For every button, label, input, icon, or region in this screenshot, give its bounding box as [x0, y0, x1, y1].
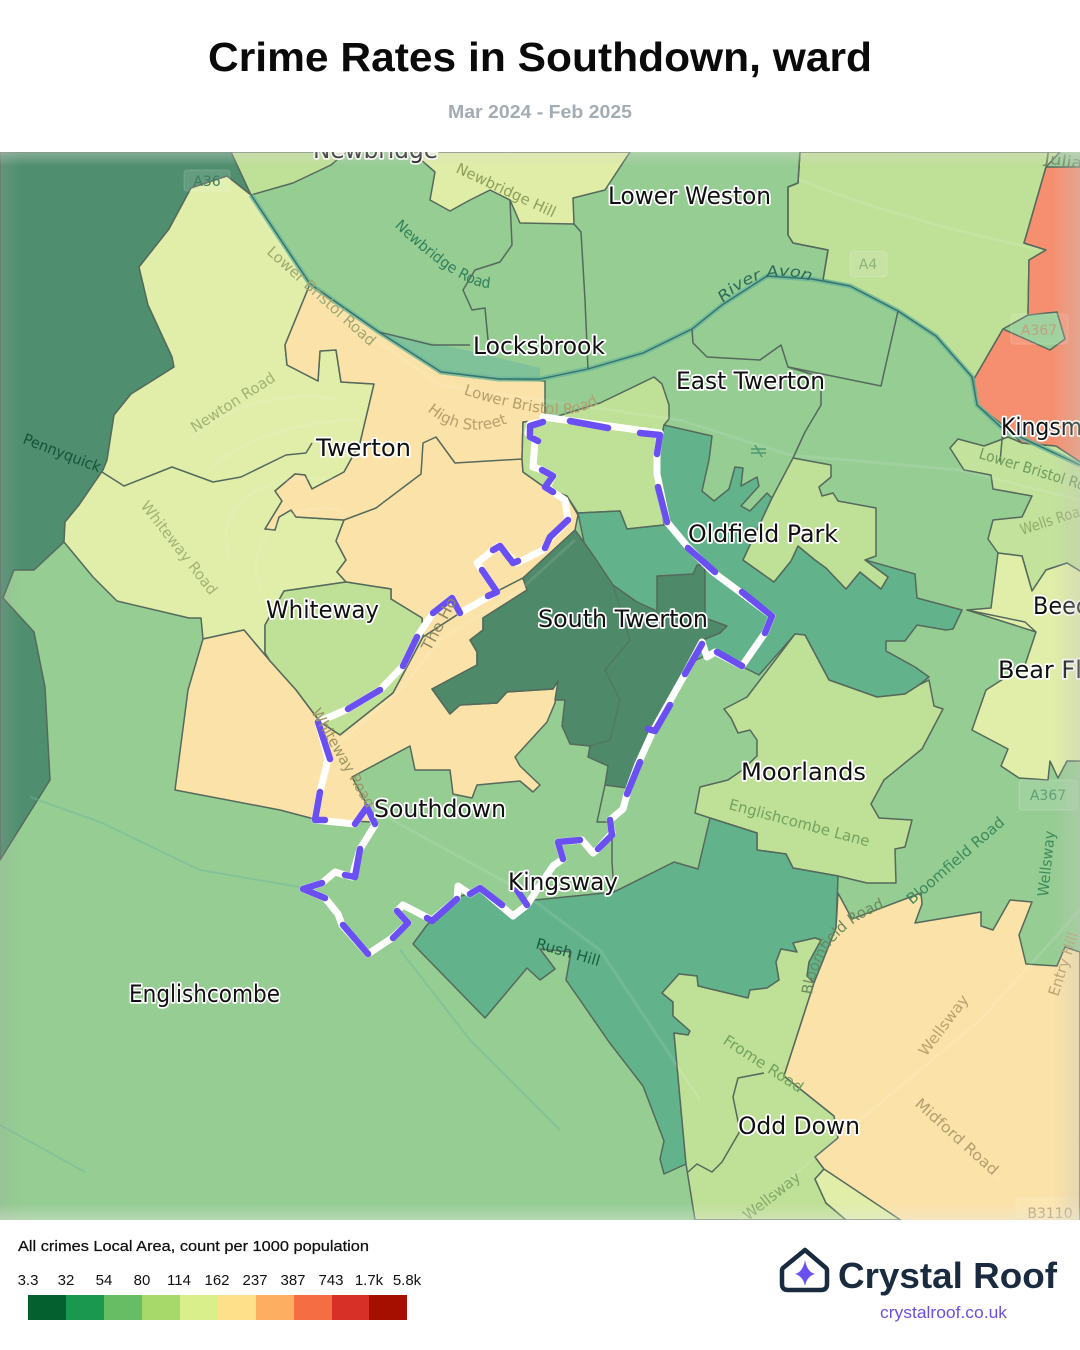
- area labels: Twerton: [315, 434, 411, 462]
- legend scale labels: 32: [58, 1272, 74, 1289]
- region: base green: [0, 152, 1080, 1220]
- region: Oldfield light green: [743, 458, 888, 589]
- date range: Mar 2024 - Feb 2025: [448, 102, 632, 122]
- road shields: A367: [1030, 788, 1066, 804]
- road labels: Pennyquick: [21, 430, 104, 476]
- area labels: Moorlands: [741, 758, 866, 786]
- road labels: River Avon: [718, 265, 812, 302]
- stream: Englishcombe brook: [0, 797, 560, 1172]
- road labels: Whiteway Road: [308, 705, 379, 811]
- website: crystalroof.co.uk: [880, 1304, 1008, 1322]
- road labels: Bloomfield Road: [903, 813, 1008, 908]
- region: upper east light: [788, 152, 1060, 379]
- area labels: Oldfield Park: [688, 520, 838, 548]
- legend scale labels: 1.7k: [355, 1272, 384, 1289]
- region: Moorlands light green: [695, 634, 943, 883]
- road labels: Newbridge Road: [395, 219, 490, 288]
- legend scale labels: [18, 1272, 422, 1289]
- area labels: Locksbrook: [473, 332, 605, 360]
- road labels: Englishcombe Lane: [727, 795, 872, 850]
- logo wordmark: Crystal Roof: [838, 1255, 1058, 1296]
- legend title: All crimes Local Area, count per 1000 population: [18, 1238, 369, 1255]
- road labels: The Ho: [417, 594, 461, 655]
- road labels: Whiteway Road: [137, 497, 221, 598]
- region: Kingsway and Rush Hill mid green: [413, 818, 838, 1174]
- road labels: Newbridge Hill: [453, 159, 559, 221]
- region: South Twerton dark: [432, 530, 727, 788]
- region: Odd Down light green: [662, 938, 846, 1220]
- legend scale labels: 54: [96, 1272, 112, 1289]
- region: dark west: [0, 152, 251, 860]
- area labels: Odd Down: [738, 1112, 860, 1140]
- title: Crime Rates in Southdown, ward: [208, 34, 872, 80]
- roads and streams: [0, 180, 1080, 1220]
- region: Newbridge Hill pale: [412, 152, 630, 224]
- region: Kingsmead red: [974, 167, 1080, 465]
- minor boundaries: [102, 152, 1036, 1172]
- region: south-east pale: [815, 1169, 908, 1220]
- region: Twerton peach: [265, 284, 578, 637]
- ward boundary: Southdown: [303, 417, 772, 954]
- road labels: Wellsway: [1034, 830, 1059, 897]
- road labels: Newton Road: [187, 368, 279, 436]
- outline: white: [303, 417, 772, 954]
- road labels: High Street: [428, 403, 508, 430]
- legend scale labels: 80: [134, 1272, 150, 1289]
- edge fade: [0, 152, 1080, 1220]
- legend scale labels: 237: [242, 1272, 268, 1289]
- road shields: A4: [859, 257, 877, 273]
- area labels: [129, 136, 1080, 1140]
- road labels: Wellsway: [915, 991, 973, 1059]
- road shields: [184, 170, 1078, 1222]
- region: Whiteway and Newton pale: [64, 176, 374, 661]
- legend scale labels: 162: [204, 1272, 230, 1289]
- legend scale labels: 387: [280, 1272, 306, 1289]
- region: Locksbrook strip: [379, 331, 540, 380]
- area labels: East Twerton: [676, 367, 825, 395]
- region: north-west light: [231, 152, 346, 195]
- area labels: Englishcombe: [129, 980, 280, 1008]
- region: north central light green: [522, 377, 669, 529]
- area labels: Whiteway: [266, 596, 379, 624]
- region: Oldfield Park mid green: [578, 425, 962, 697]
- road shields: A36: [193, 174, 221, 190]
- road labels: Lower Bristol Road: [263, 243, 379, 350]
- road labels: Midford Road: [911, 1095, 1002, 1179]
- legend scale labels: 5.8k: [393, 1272, 422, 1289]
- area labels: Lower Weston: [608, 182, 771, 210]
- legend scale labels: 114: [167, 1272, 191, 1289]
- road labels: Lower Bristol Road: [464, 384, 598, 414]
- road labels: Frome Road: [720, 1031, 807, 1096]
- region: east light green: [950, 437, 1080, 591]
- area labels: Southdown: [374, 795, 506, 823]
- choropleth map: [0, 152, 1080, 1220]
- river Avon: [251, 195, 1080, 465]
- area labels: Kingsway: [508, 868, 618, 896]
- panel: area fills: [0, 152, 1080, 1225]
- icon: Crystal Roof house logo: [782, 1250, 827, 1290]
- header: [208, 34, 872, 122]
- region: Whiteway light green: [265, 582, 423, 735]
- region: south-east peach: [784, 893, 1080, 1225]
- legend colour swatches: [28, 1295, 407, 1320]
- icon: railway station: [751, 445, 766, 457]
- road labels: Rush Hill: [534, 935, 602, 970]
- region: Southdown peach: [175, 578, 558, 822]
- area labels: South Twerton: [538, 605, 708, 633]
- footer: [18, 1238, 1058, 1322]
- legend scale labels: 743: [318, 1272, 344, 1289]
- legend scale labels: 3.3: [18, 1272, 38, 1289]
- outline: purple dashes: [303, 421, 772, 954]
- road shields: A367: [1021, 323, 1057, 339]
- road labels: Bloomfield Road: [801, 898, 884, 994]
- region: Bear Flat pale: [967, 553, 1080, 780]
